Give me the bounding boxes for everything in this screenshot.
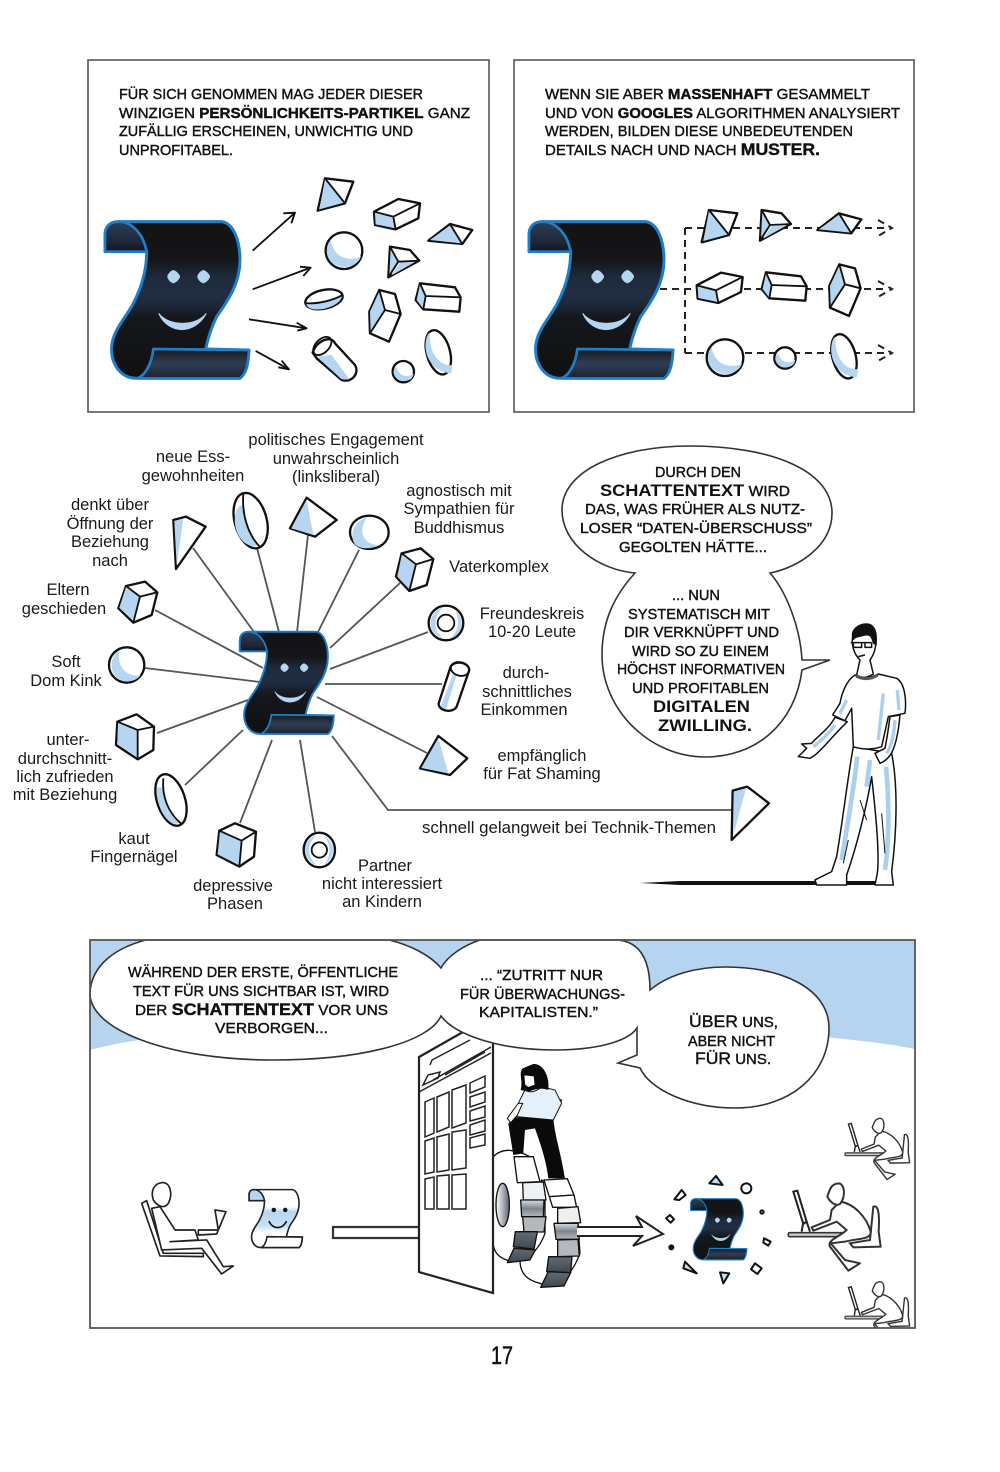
caption: WINZIGEN PERSÖNLICHKEITS-PARTIKEL GANZ (119, 105, 470, 122)
trait labels: unter- (46, 731, 90, 749)
page number: 17 (491, 1342, 513, 1370)
bubble text: TEXT FÜR UNS SICHTBAR IST, WIRD (133, 982, 389, 1000)
figure: woman standing on wheels (507, 1064, 565, 1178)
caption (545, 87, 900, 159)
trait labels: kaut (118, 830, 150, 848)
ground shadow (640, 881, 880, 885)
bubble text: UND PROFITABLEN (632, 681, 769, 697)
bubble text: WÄHREND DER ERSTE, ÖFFENTLICHE (128, 963, 398, 981)
trait labels: Partner (358, 857, 413, 875)
bubble text: FÜR ÜBERWACHUNGS- (460, 985, 625, 1003)
panel frame and sky (90, 940, 915, 1328)
trait labels: mit Beziehung (13, 786, 117, 804)
caption: FÜR SICH GENOMMEN MAG JEDER DIESER (119, 85, 423, 103)
bubble text: KAPITALISTEN.” (479, 1005, 598, 1021)
trait labels: 10-20 Leute (488, 623, 576, 641)
bubble text: DURCH DEN (655, 465, 741, 481)
bubble text: FÜR UNS. (695, 1049, 771, 1068)
bubble text (580, 465, 812, 735)
trait labels: geschieden (22, 600, 106, 618)
bubble text: LOSER “DATEN-ÜBERSCHUSS” (580, 519, 812, 537)
speech bubbles (90, 940, 829, 1108)
trait labels: schnittliches (482, 683, 572, 701)
trait labels: Phasen (207, 895, 263, 913)
bubble text: DIR VERKNÜPFT UND (624, 623, 779, 641)
door (419, 1028, 493, 1293)
caption: UNPROFITABEL. (119, 143, 233, 159)
trait labels: agnostisch mit (406, 482, 512, 500)
trait labels (13, 431, 716, 913)
caption: UND VON GOOGLES ALGORITHMEN ANALYSIERT (545, 106, 900, 122)
trait shapes, lower right (304, 660, 471, 867)
icon: shadow text scroll (105, 222, 249, 378)
caption: ZUFÄLLIG ERSCHEINEN, UNWICHTIG UND (119, 123, 413, 140)
caption: DETAILS NACH UND NACH MUSTER. (545, 140, 820, 159)
trait labels: neue Ess- (156, 448, 230, 466)
scattered data shapes with dark scroll (666, 1176, 771, 1283)
icon: central scroll (240, 632, 334, 734)
panel frame (514, 60, 914, 412)
trait labels: politisches Engagement (248, 431, 424, 449)
trait labels: Soft (51, 653, 81, 671)
trait labels: schnell gelangweit bei Technik-Themen (422, 819, 716, 837)
icon: shadow text scroll (529, 222, 673, 378)
trait labels: unwahrscheinlich (273, 450, 399, 468)
icon: small shadow text scroll (691, 1199, 747, 1260)
bubble text: GEGOLTEN HÄTTE... (619, 539, 767, 556)
bubble text: HÖCHST INFORMATIVEN (617, 660, 785, 678)
connector lines (145, 535, 732, 832)
wheels with treads (493, 1150, 581, 1287)
trait labels: empfänglich (498, 747, 586, 765)
trait labels: Eltern (46, 581, 90, 599)
trait shapes, upper left (109, 489, 337, 683)
trait labels: Fingernägel (90, 848, 178, 866)
trait labels: Sympathien für (404, 500, 515, 518)
trait labels: nach (92, 552, 128, 570)
caption: WENN SIE ABER MASSENHAFT GESAMMELT (545, 87, 870, 103)
icon: plain text scroll (249, 1190, 302, 1248)
trait labels: (linksliberal) (292, 468, 380, 486)
trait labels: nicht interessiert (322, 875, 442, 893)
trait labels: an Kindern (342, 893, 422, 911)
bubble text: ... NUN (672, 588, 720, 604)
illustration: person with laptop (142, 1183, 233, 1274)
trait labels: durchschnitt- (18, 750, 112, 768)
bubble text: WIRD SO ZU EINEM (632, 644, 769, 660)
bubble text: ABER NICHT (688, 1034, 775, 1050)
figure: man with glasses (798, 624, 906, 885)
trait labels: Vaterkomplex (449, 558, 550, 576)
trait shapes, lower left (116, 714, 333, 867)
bubble text: DER SCHATTENTEXT VOR UNS (135, 1000, 388, 1019)
bubble outline (562, 446, 832, 757)
bubble text: ÜBER UNS, (689, 1012, 778, 1031)
trait labels: gewohnheiten (142, 467, 244, 485)
bubble text: DAS, WAS FRÜHER ALS NUTZ- (585, 500, 805, 518)
speech bubble: digital twin (562, 446, 832, 757)
bubble text (128, 963, 778, 1068)
bubble text: SCHATTENTEXT WIRD (600, 481, 790, 500)
arrow into door (333, 1219, 450, 1251)
arrow out of the wheels (577, 1216, 663, 1246)
bubble text: ZWILLING. (658, 716, 752, 735)
trait labels: Einkommen (480, 701, 568, 719)
trait labels: Öffnung der (67, 515, 154, 533)
bubble text: ... “ZUTRITT NUR (480, 968, 603, 984)
trait labels: lich zufrieden (16, 768, 114, 786)
caption: WERDEN, BILDEN DIESE UNBEDEUTENDEN (545, 124, 853, 140)
panel border (90, 940, 915, 1328)
ordered shapes (697, 210, 861, 381)
figures: analysts at desks (788, 1118, 910, 1343)
trait labels: Freundeskreis (480, 605, 584, 623)
trait labels: Beziehung (71, 533, 149, 551)
radial diagram: digital twin traits (13, 431, 769, 913)
trait labels: für Fat Shaming (483, 765, 601, 783)
caption (119, 85, 470, 159)
dashed pattern lines (660, 220, 892, 361)
panel: scattered personality particles (88, 60, 489, 412)
panel: surveillance capitalists door (90, 940, 915, 1343)
bubble text: SYSTEMATISCH MIT (628, 607, 770, 623)
panel frame (88, 60, 489, 412)
bubble text: VERBORGEN... (215, 1021, 328, 1037)
trait labels: durch- (503, 664, 549, 682)
scattered shapes with arrows (249, 178, 472, 382)
trait labels: Dom Kink (30, 672, 103, 690)
trait labels: depressive (193, 877, 273, 895)
trait labels: Buddhismus (414, 519, 504, 537)
bubble text: DIGITALEN (653, 697, 750, 716)
trait labels: denkt über (71, 496, 149, 514)
trait shape: technology topics (732, 787, 769, 840)
trait shapes, upper right (350, 516, 463, 640)
panel: shapes arranged into patterns (514, 60, 914, 412)
